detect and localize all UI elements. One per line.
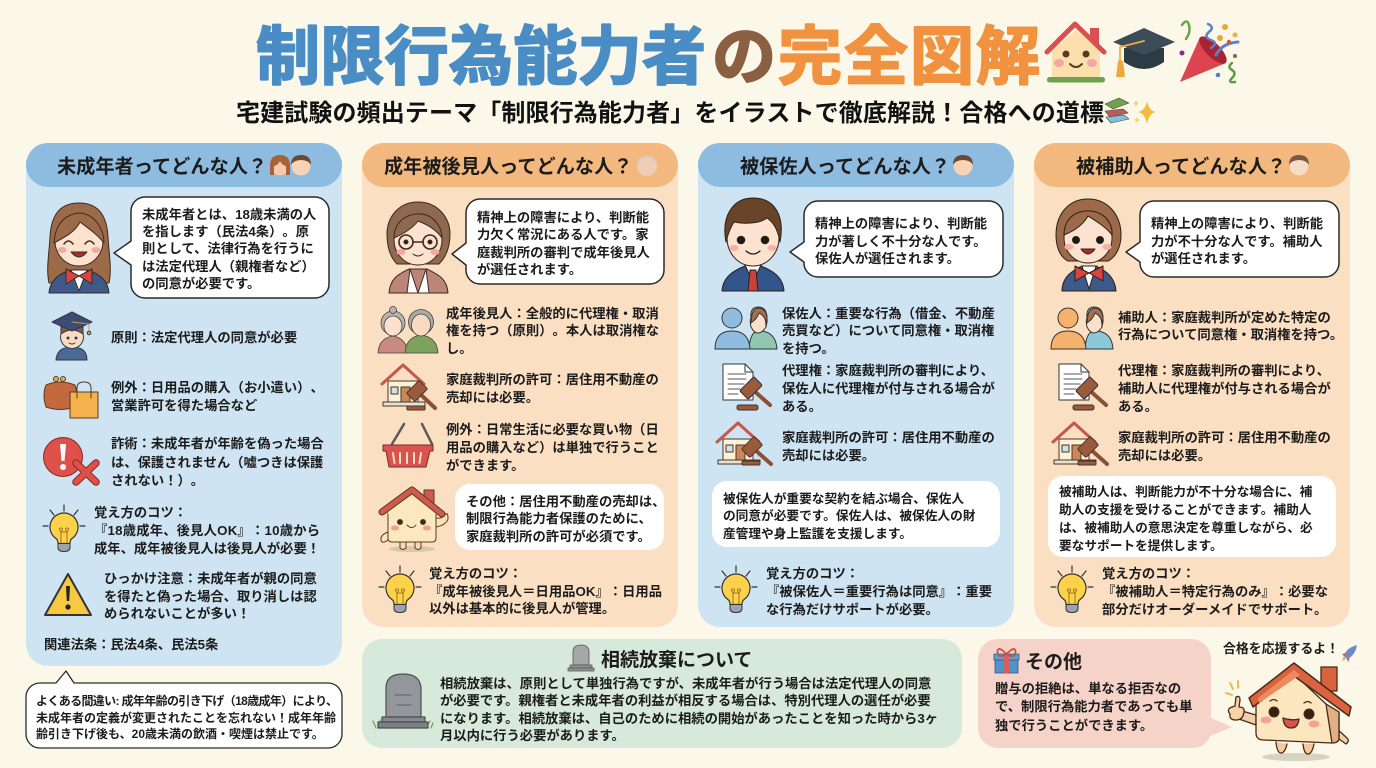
speech bubble: definition: [452, 199, 664, 284]
heading: 成年被後見人: 成年被後見人ってどんな人？: [384, 155, 632, 178]
icon: books: [1105, 98, 1129, 123]
box: その他: その他：居住用不動産の売却は、: [466, 493, 665, 509]
text: 保佐人: [782, 305, 995, 356]
heading: 被補助人: 被補助人ってどんな人？: [1076, 156, 1286, 178]
text: 家庭裁判所の許可: [782, 429, 995, 463]
text: 関連法条: 関連法条：民法4条、民法5条: [44, 636, 218, 652]
icon: house and gavel: [717, 423, 771, 465]
text: 成年後見人: 権を持つ（原則）。本人は取消権な: [446, 322, 659, 338]
box: 補足説明: 被保佐人が重要な契約を結ぶ場合、保佐人: [723, 491, 964, 506]
text: 覚え方のコツ: 覚え方のコツ：: [94, 504, 187, 520]
text: 覚え方のコツ: 『被保佐人＝重要行為は同意』：重要: [766, 583, 992, 599]
text: 覚え方のコツ: 『18歳成年、後見人OK』：10歳から: [94, 522, 320, 538]
box: 補足説明: [1048, 476, 1336, 557]
panel: その他: [978, 639, 1232, 748]
icon: shopping basket: [383, 424, 433, 467]
speech bubble: definition: 未成年者とは、18歳未満の人: [142, 206, 317, 222]
heading: 未成年者: [26, 143, 342, 187]
heading: 相続放棄について: 相続放棄について: [601, 649, 752, 671]
speech bubble: definition: を指します（民法4条）。原: [142, 223, 309, 239]
icon: document and gavel: [723, 364, 770, 410]
text: 覚え方のコツ: [94, 504, 320, 556]
text: 例外: [111, 379, 324, 413]
speech bubble: definition: 保佐人が選任されます。: [815, 250, 960, 266]
title: の: [712, 21, 776, 93]
speech bubble: definition: が選任されます。: [1151, 250, 1256, 266]
speech bubble: definition: が選任されます。: [477, 261, 582, 277]
text: 覚え方のコツ: 覚え方のコツ：: [766, 565, 859, 581]
speech bubble: definition: [1126, 201, 1339, 277]
icon: elderly couple: [378, 306, 438, 353]
text: 家庭裁判所の許可: 家庭裁判所の許可：居住用不動産の: [1118, 429, 1331, 445]
text: 代理権: 補助人に代理権が付与される場合が: [1118, 380, 1331, 396]
box: 補足説明: は、被補助人の意思決定を尊重しながら、必: [1059, 520, 1313, 535]
text: ひっかけ注意: [104, 570, 317, 621]
text: 覚え方のコツ: 覚え方のコツ：: [1102, 565, 1195, 581]
text: 贈与の拒絶: [995, 680, 1192, 733]
text: 贈与の拒絶: 贈与の拒絶は、単なる拒否なの: [995, 680, 1181, 696]
text: 補助人: [1118, 309, 1343, 342]
icon: house and gavel: [1053, 423, 1107, 465]
text: 例外: ができます。: [446, 457, 524, 473]
text: 相続放棄の説明: が必要です。親権者と未成年者の利益が相反する場合は、特別代理人の選任が必要: [440, 692, 931, 708]
icon: gift: [994, 649, 1019, 673]
icon: light bulb: [379, 566, 421, 612]
text: 贈与の拒絶: 独で行うことができます。: [995, 717, 1153, 733]
box: 補足説明: [712, 481, 1000, 547]
text: 家庭裁判所の許可: 家庭裁判所の許可：居住用不動産の: [446, 371, 659, 387]
text: 詐術: されない！）。: [111, 473, 204, 488]
text: 相続放棄の説明: 月以内に行う必要があります。: [440, 727, 625, 743]
speech bubble: definition: は法定代理人（親権者など）: [142, 258, 315, 274]
text: 例外: 例外：日用品の購入（お小遣い）、: [111, 379, 324, 395]
text: 代理権: ある。: [782, 399, 822, 414]
box: その他: 家庭裁判所の許可が必須です。: [466, 528, 651, 544]
text: 相続放棄の説明: になります。相続放棄は、自己のために相続の開始があったことを知った時から3ヶ: [440, 710, 938, 726]
heading: 被保佐人: [698, 143, 1014, 187]
text: ひっかけ注意: ひっかけ注意：未成年者が親の同意: [104, 570, 317, 586]
box: 補足説明: 助人の支援を受けることができます。補助人: [1059, 502, 1312, 517]
icon: gravestone: [373, 674, 433, 728]
illustration: smiling girl with bob: [1056, 199, 1121, 291]
text: 覚え方のコツ: 覚え方のコツ：: [429, 565, 522, 581]
speech bubble: definition: 精神上の障害により、判断能: [1151, 215, 1323, 231]
text: 家庭裁判所の許可: [1118, 429, 1331, 463]
heading: 被保佐人: 被保佐人ってどんな人？: [740, 156, 950, 178]
text: 覚え方のコツ: 『被補助人＝特定行為のみ』：必要な: [1102, 583, 1328, 599]
icon: smiling house: [1047, 24, 1105, 82]
panel: 被保佐人: [698, 143, 1014, 627]
text: 例外: 営業許可を得た場合など: [111, 397, 258, 413]
text: 相続放棄の説明: 相続放棄は、原則として単独行為ですが、未成年者が行う場合は法定代理人の同意: [440, 675, 931, 691]
title: [256, 21, 1040, 93]
illustration: woman with glasses: [387, 202, 450, 293]
icon: sparkles: [1133, 100, 1156, 124]
speech bubble: definition: 精神上の障害により、判断能: [477, 209, 649, 225]
text: 代理権: ある。: [1118, 399, 1158, 414]
panel: 成年被後見人: [362, 143, 678, 627]
text: 家庭裁判所の許可: 売却には必要。: [782, 447, 875, 463]
illustration: waving house: [381, 490, 448, 552]
text: 覚え方のコツ: [429, 565, 662, 616]
callout: よくある間違い: よくある間違い: 成年年齢の引き下げ（18歳成年）により、: [36, 693, 338, 708]
heading: 成年被後見人: [362, 143, 678, 187]
text: 代理権: 代理権：家庭裁判所の審判により、: [1118, 362, 1330, 378]
box: 補足説明: の同意が必要です。保佐人は、被保佐人の財: [723, 508, 976, 523]
speech bubble: definition: の同意が必要です。: [142, 275, 260, 291]
text: 詐術: は、保護されません（嘘つきは保護: [111, 454, 323, 470]
text: 応援メッセージ: 合格を応援するよ！: [1223, 641, 1339, 656]
icon: small gravestone: [568, 645, 594, 671]
text: 詐術: [111, 435, 324, 488]
text: 例外: 用品の購入など）は単独で行うこと: [446, 439, 659, 455]
box: 補足説明: 要なサポートを提供します。: [1059, 538, 1223, 553]
icon: light bulb: [1051, 566, 1093, 612]
title: 制限行為能力者: [256, 21, 706, 93]
text: 家庭裁判所の許可: 家庭裁判所の許可：居住用不動産の: [782, 429, 995, 445]
text: ひっかけ注意: を得たと偽った場合、取り消しは認: [104, 588, 317, 604]
icon: party popper: [1180, 22, 1238, 82]
illustration: boy in suit: [722, 198, 784, 291]
text: 覚え方のコツ: 以外は基本的に後見人が管理。: [429, 600, 615, 616]
text: 保佐人: 売買など）について同意権・取消権: [782, 322, 994, 338]
speech bubble: definition: 力が不十分な人です。補助人: [1151, 233, 1323, 249]
text: 家庭裁判所の許可: 売却には必要。: [1118, 447, 1211, 463]
heading: 被補助人: [1034, 143, 1350, 187]
title: 完全図解: [778, 21, 1040, 93]
icon: two people: [715, 307, 777, 349]
text: 相続放棄の説明: [440, 675, 938, 743]
text: 詐術: 詐術：未成年者が年齢を偽った場合: [111, 435, 324, 451]
text: ひっかけ注意: められないことが多い！: [104, 605, 250, 621]
text: 贈与の拒絶: で、制限行為能力者であっても単: [995, 698, 1192, 714]
text: 成年後見人: 成年後見人：全般的に代理権・取消: [446, 305, 659, 321]
text: 覚え方のコツ: [766, 565, 992, 617]
box: 補足説明: 産管理や身上監護を支援します。: [723, 526, 912, 541]
illustration: house mascot giving thumbs up: [1226, 663, 1351, 761]
icon: rocket: [1342, 645, 1357, 662]
text: 補助人: 行為について同意権・取消権を持つ。: [1118, 326, 1343, 342]
text: 代理権: 代理権：家庭裁判所の審判により、: [782, 362, 994, 378]
speech bubble: definition: 力欠く常況にある人です。家: [477, 226, 649, 242]
speech bubble: definition: 精神上の障害により、判断能: [815, 215, 987, 231]
speech bubble: definition: [114, 197, 329, 298]
text: 覚え方のコツ: 『成年被後見人＝日用品OK』：日用品: [429, 583, 662, 599]
text: 代理権: [782, 362, 995, 414]
text: 成年後見人: [446, 305, 659, 356]
callout: よくある間違い: [26, 671, 342, 748]
text: 保佐人: 保佐人：重要な行為（借金、不動産: [782, 305, 995, 321]
panel: 相続放棄について: [362, 639, 962, 748]
callout: よくある間違い: 未成年者の定義が変更されたことを忘れない！成年年齢: [36, 710, 336, 725]
text: 代理権: [1118, 362, 1331, 414]
callout: よくある間違い: 齢引き下げ後も、20歳未満の飲酒・喫煙は禁止です。: [36, 726, 324, 741]
speech bubble: definition: [790, 201, 1003, 277]
icon: house and gavel: [382, 365, 435, 410]
text: 補助人: 補助人：家庭裁判所が定めた特定の: [1118, 309, 1331, 325]
icon: light bulb: [43, 505, 85, 552]
text: 代理権: 保佐人に代理権が付与される場合が: [782, 380, 995, 396]
icon: light bulb: [715, 566, 757, 612]
heading: その他: その他: [1025, 651, 1082, 673]
text: 覚え方のコツ: 成年、成年被後見人は後見人が必要！: [94, 540, 320, 556]
subtitle: 宅建試験の頻出テーマ「制限行為能力者」をイラストで徹底解説！合格への道標: [236, 100, 1104, 127]
speech bubble: definition: 庭裁判所の審判で成年後見人: [477, 244, 651, 260]
speech bubble: definition: 力が著しく不十分な人です。: [815, 233, 987, 249]
panel: 被補助人: [1034, 143, 1350, 627]
text: 例外: 例外：日常生活に必要な買い物（日: [446, 421, 659, 437]
heading: 未成年者: 未成年者ってどんな人？: [57, 155, 267, 178]
icon: warning circle with cross: [44, 438, 96, 482]
box: 補足説明: 被補助人は、判断能力が不十分な場合に、補: [1059, 484, 1313, 499]
icon: two people: [1051, 307, 1113, 349]
speech bubble: definition: 則として、法律行為を行うに: [142, 240, 314, 256]
text: 成年後見人: し。: [446, 341, 473, 356]
text: 家庭裁判所の許可: [446, 371, 659, 405]
icon: purse and shopping bag: [44, 376, 98, 418]
box: その他: [455, 484, 665, 550]
text: 保佐人: を持つ。: [782, 340, 835, 356]
icon: graduate boy: [52, 312, 92, 360]
illustration: smiling student girl: [48, 203, 110, 293]
icon: warning triangle: [45, 574, 91, 615]
text: 例外: [446, 421, 659, 473]
box: その他: 制限行為能力者保護のために、: [466, 510, 652, 526]
text: 覚え方のコツ: 部分だけオーダーメイドでサポート。: [1102, 601, 1327, 617]
text: 覚え方のコツ: な行為だけサポートが必要。: [766, 601, 939, 617]
panel: 未成年者: [26, 143, 342, 666]
text: 家庭裁判所の許可: 売却には必要。: [446, 389, 539, 405]
text: 覚え方のコツ: [1102, 565, 1328, 617]
text: 原則: 原則：法定代理人の同意が必要: [111, 329, 297, 345]
icon: document and gavel: [1059, 364, 1106, 410]
icon: graduation cap: [1113, 28, 1175, 77]
